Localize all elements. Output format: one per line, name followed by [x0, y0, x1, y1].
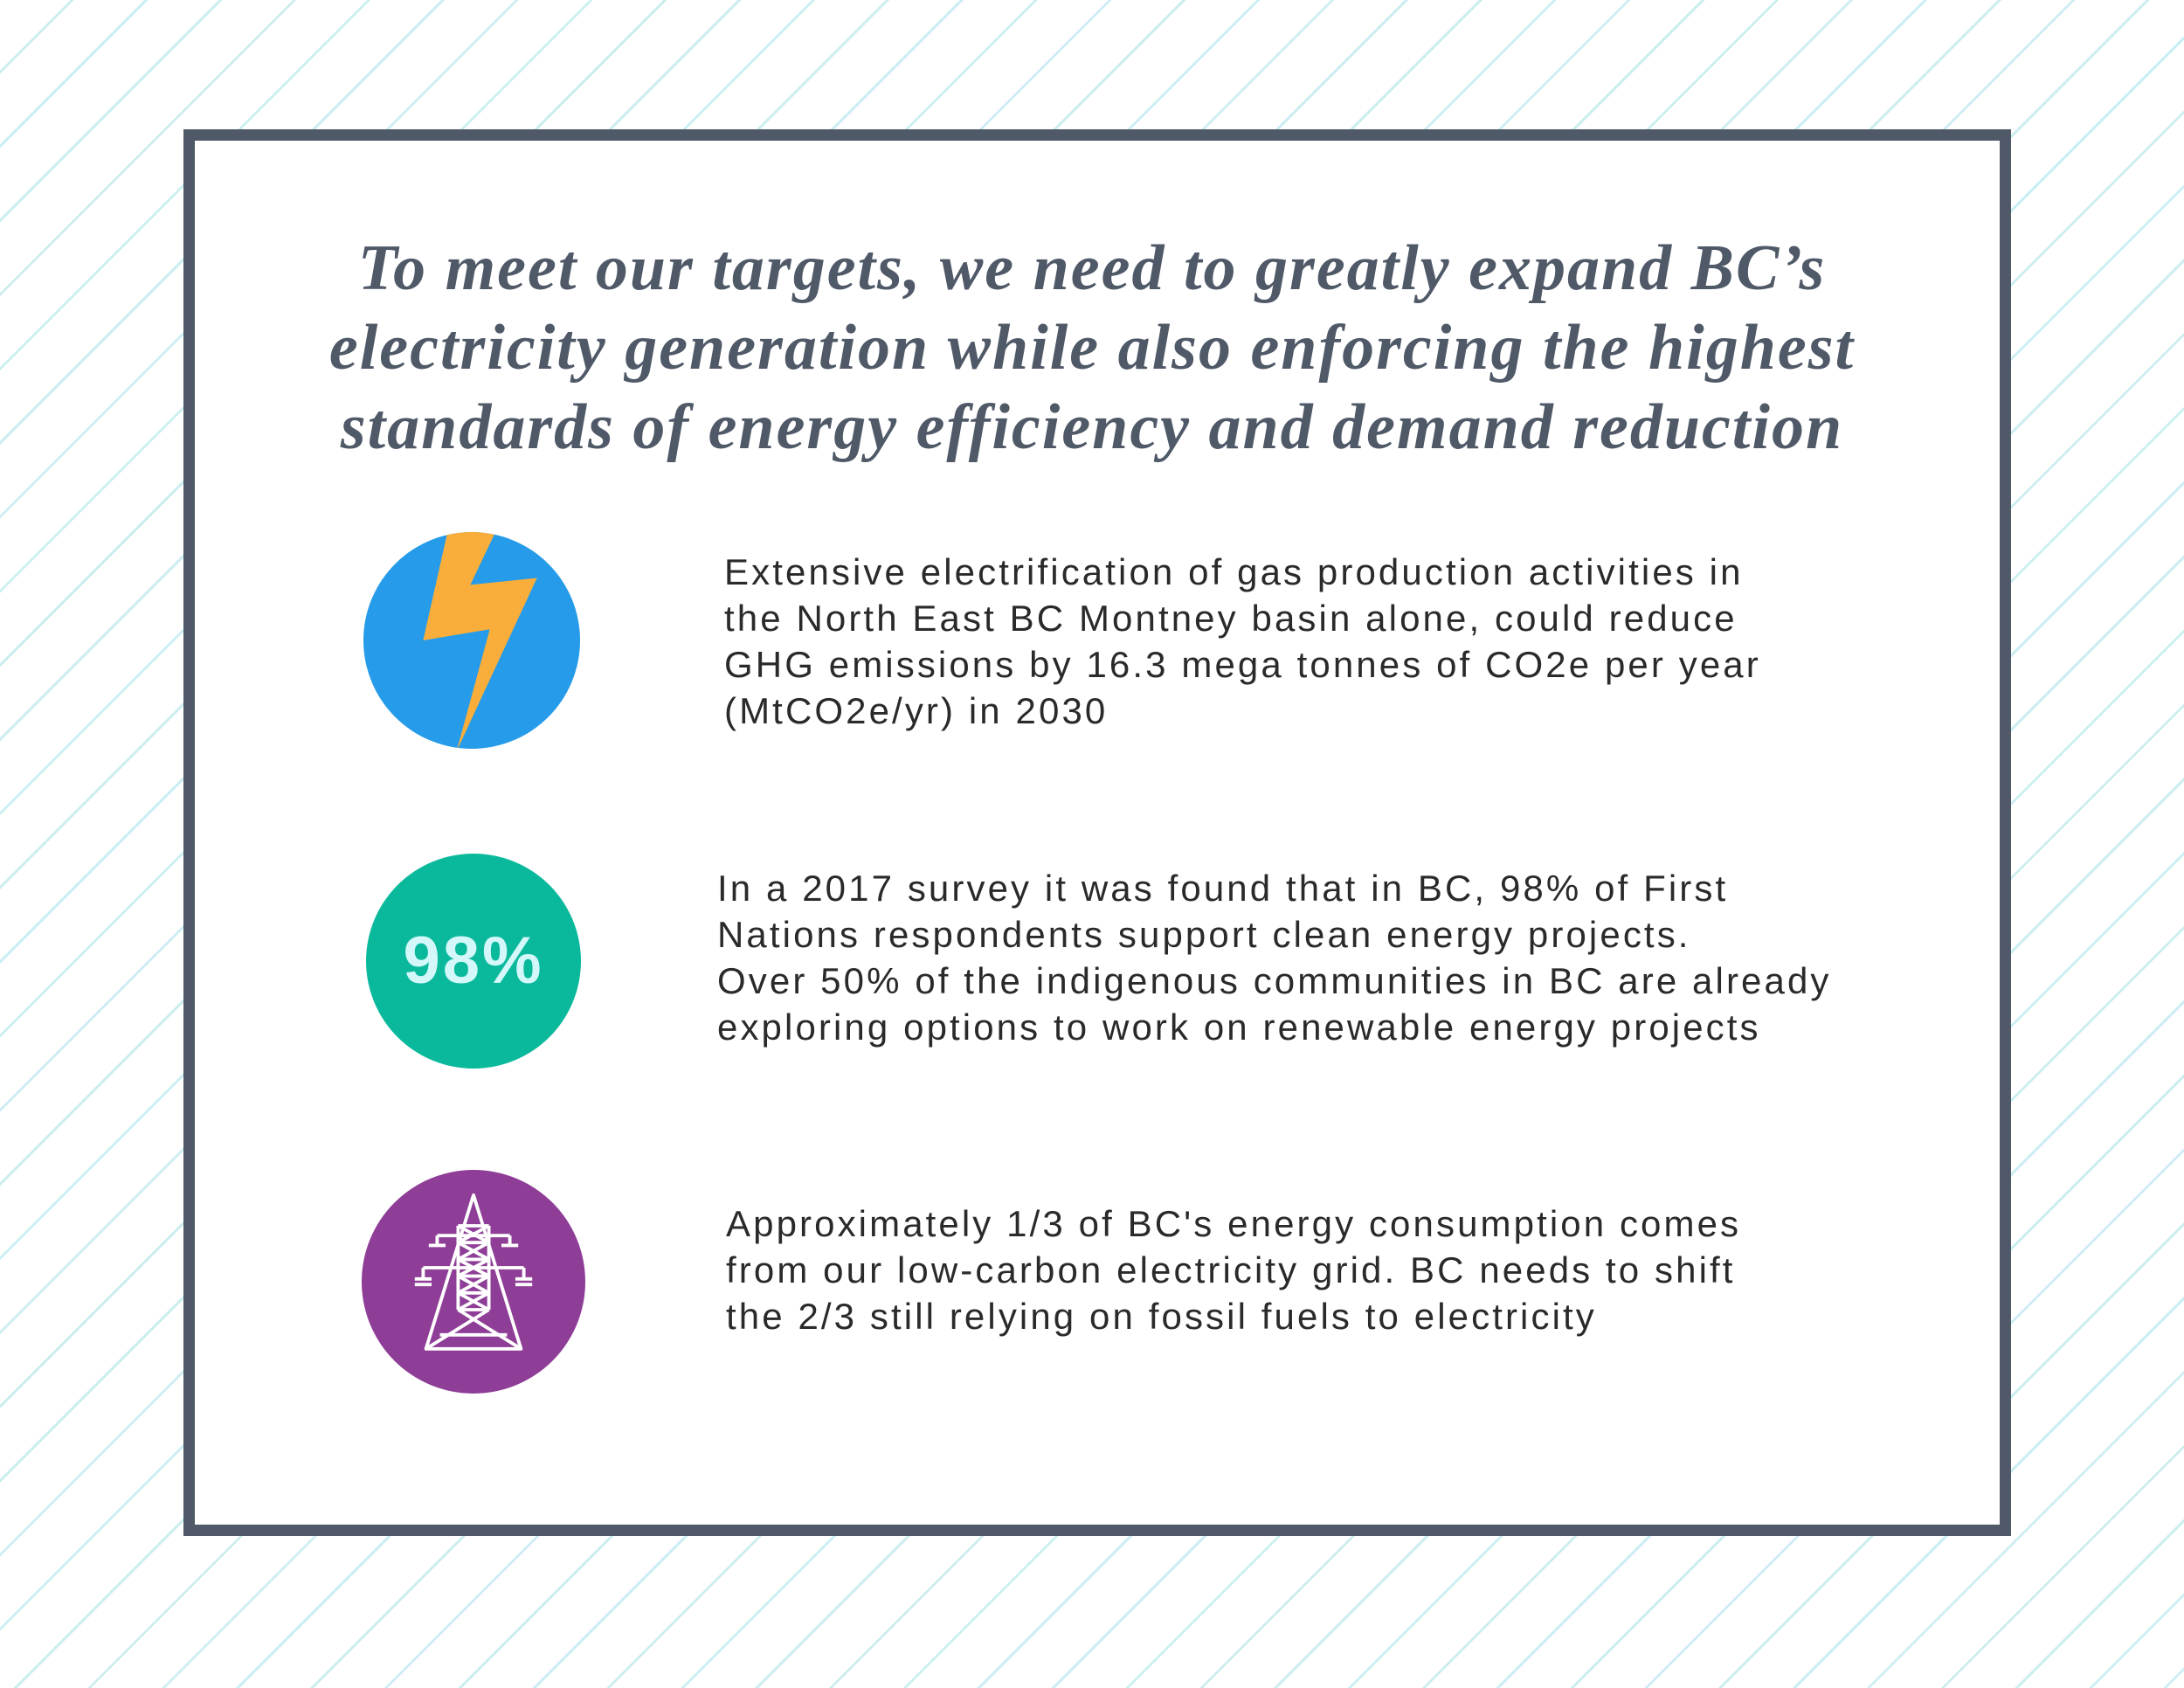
icon: transmission tower: [362, 1170, 585, 1394]
text block 3: from our low-carbon electricity grid. BC needs to shift: [726, 1249, 1736, 1290]
title: standards of energy efficiency and demand reduction: [341, 391, 1843, 463]
icon: 98% circle: 98%: [403, 924, 544, 998]
text block 3: [726, 1203, 1741, 1337]
title: [329, 232, 1855, 463]
text block 1: (MtCO2e/yr) in 2030: [724, 690, 1108, 731]
title: To meet our targets, we need to greatly expand BC’s: [358, 232, 1826, 304]
text block 1: [724, 551, 1761, 731]
text block 1: Extensive electrification of gas production activities in: [724, 551, 1744, 592]
text block 2: exploring options to work on renewable energy projects: [717, 1007, 1761, 1048]
icon: 98% circle: [366, 854, 581, 1069]
title: electricity generation while also enforcing the highest: [329, 312, 1855, 384]
text block 2: Over 50% of the indigenous communities in BC are already: [717, 960, 1832, 1001]
frame panel: [183, 129, 2011, 1536]
text block 1: GHG emissions by 16.3 mega tonnes of CO2e per year: [724, 644, 1761, 685]
text block 3: Approximately 1/3 of BC's energy consumption comes: [726, 1203, 1741, 1244]
icon: lightning bolt: [363, 532, 580, 749]
text block 2: [717, 868, 1832, 1048]
text block 2: In a 2017 survey it was found that in BC, 98% of First: [717, 868, 1728, 909]
text block 2: Nations respondents support clean energy projects.: [717, 914, 1691, 955]
text block 3: the 2/3 still relying on fossil fuels to electricity: [726, 1296, 1597, 1337]
text block 1: the North East BC Montney basin alone, could reduce: [724, 598, 1738, 639]
